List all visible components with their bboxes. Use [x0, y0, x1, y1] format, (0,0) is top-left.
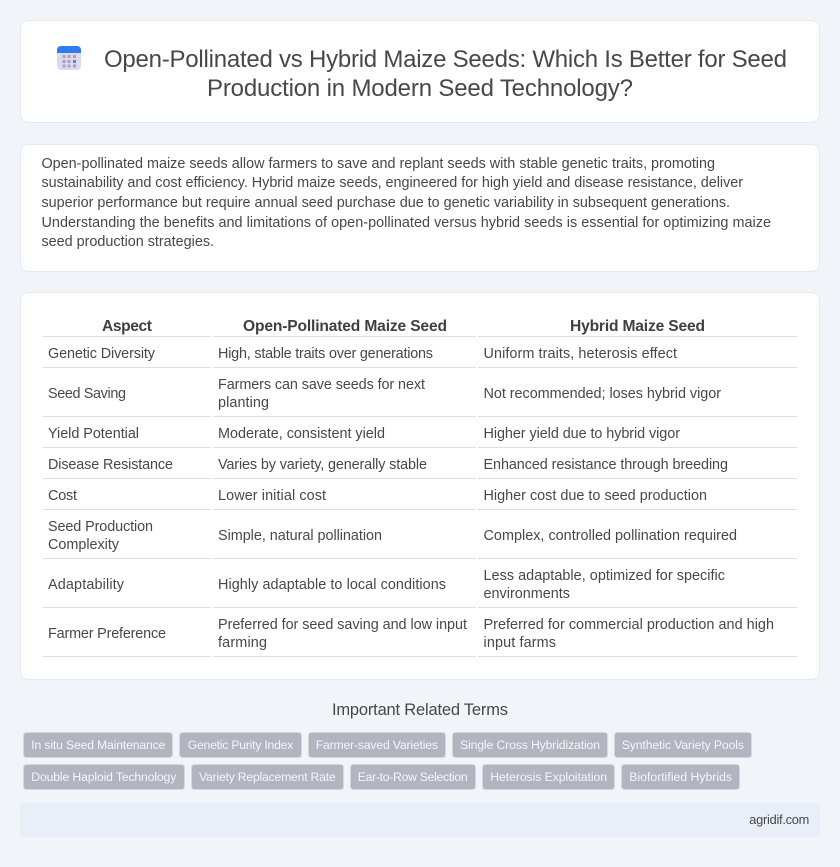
panel: title: [20, 20, 820, 122]
tag: ear-to-row selection: [350, 764, 476, 790]
tag: in situ seed maintenance: [24, 732, 172, 758]
related terms tags: [24, 732, 752, 790]
row: yield potential: Higher yield due to hybrid vigor: [484, 426, 680, 442]
tag: synthetic variety pools: Synthetic Variety Pools: [622, 738, 744, 752]
table header: Aspect: [102, 318, 152, 335]
row: adaptability: [43, 568, 797, 608]
row: genetic diversity: High, stable traits over generations: [218, 346, 433, 362]
row: cost: Cost: [48, 488, 77, 504]
tag: ear-to-row selection: Ear-to-Row Selection: [358, 770, 468, 784]
intro paragraph: superior performance but require annual seed purchase due to genetic variability in subsequent generations.: [42, 195, 730, 211]
icon: calendar: [57, 46, 81, 70]
row: yield potential: Moderate, consistent yield: [218, 426, 385, 442]
row: farmer preference: input farms: [484, 635, 556, 651]
row: farmer preference: farming: [218, 635, 267, 651]
row: seed production complexity: [43, 519, 797, 559]
row: genetic diversity: [43, 346, 797, 368]
row: seed saving: planting: [218, 395, 269, 411]
table header: Hybrid Maize Seed: [570, 318, 705, 335]
tag: variety replacement rate: Variety Replacement Rate: [199, 770, 336, 784]
row: seed saving: Farmers can save seeds for next: [218, 377, 425, 393]
row: genetic diversity: Uniform traits, heterosis effect: [484, 346, 677, 362]
row: adaptability: Less adaptable, optimized for specific: [484, 568, 725, 584]
row: disease resistance: [43, 457, 797, 479]
tag: double haploid technology: [24, 764, 184, 790]
row: genetic diversity: Genetic Diversity: [48, 346, 156, 362]
intro paragraph: Understanding the benefits and limitations of open-pollinated versus hybrid seeds is essential for optimizing maize: [42, 215, 771, 231]
row: seed saving: Seed Saving: [48, 386, 126, 402]
row: adaptability: environments: [484, 586, 570, 602]
tag: variety replacement rate: [192, 764, 344, 790]
tag: biofortified hybrids: Biofortified Hybrids: [629, 770, 732, 784]
intro paragraph: Open-pollinated maize seeds allow farmers to save and replant seeds with stable genetic traits, promoting: [42, 156, 715, 172]
table header: Open-Pollinated Maize Seed: [243, 318, 447, 335]
row: farmer preference: [43, 617, 797, 657]
tag: biofortified hybrids: [622, 764, 740, 790]
tag: in situ seed maintenance: In situ Seed Maintenance: [31, 738, 166, 752]
tag: heterosis exploitation: [482, 764, 614, 790]
tag: genetic purity index: [180, 732, 302, 758]
row: seed saving: [43, 377, 797, 417]
tag: double haploid technology: Double Haploid Technology: [31, 770, 177, 784]
row: cost: Lower initial cost: [218, 488, 326, 504]
intro paragraph: [42, 156, 771, 250]
tag: heterosis exploitation: Heterosis Exploitation: [490, 770, 607, 784]
title text: [104, 46, 787, 102]
row: cost: Higher cost due to seed production: [484, 488, 707, 504]
table header: [43, 318, 797, 337]
row: adaptability: Adaptability: [48, 577, 125, 593]
row: seed production complexity: Seed Production: [48, 519, 153, 535]
row: seed saving: Not recommended; loses hybrid vigor: [484, 386, 721, 402]
row: disease resistance: Disease Resistance: [48, 457, 173, 473]
tag: farmer-saved varieties: Farmer-saved Varieties: [316, 738, 438, 752]
intro paragraph: seed production strategies.: [42, 234, 214, 250]
row: seed production complexity: Complex, controlled pollination required: [484, 528, 737, 544]
row: disease resistance: Enhanced resistance through breeding: [484, 457, 728, 473]
panel: comparison table: [20, 292, 820, 680]
panel: introduction: [20, 144, 820, 272]
row: cost: [43, 488, 797, 510]
tag: synthetic variety pools: [614, 732, 752, 758]
row: seed production complexity: Simple, natural pollination: [218, 528, 382, 544]
row: adaptability: Highly adaptable to local conditions: [218, 577, 446, 593]
tag: single cross hybridization: Single Cross Hybridization: [460, 738, 600, 752]
row: farmer preference: Preferred for commercial production and high: [484, 617, 774, 633]
row: seed production complexity: Complexity: [48, 537, 120, 553]
tag: farmer-saved varieties: [308, 732, 446, 758]
tag: genetic purity index: Genetic Purity Index: [188, 738, 293, 752]
footer: [20, 803, 820, 837]
row: farmer preference: Preferred for seed saving and low input: [218, 617, 467, 633]
row: disease resistance: Varies by variety, generally stable: [218, 457, 427, 473]
heading: important related terms: Important Related Terms: [332, 701, 508, 719]
tag: single cross hybridization: [452, 732, 608, 758]
title text: Open-Pollinated vs Hybrid Maize Seeds: Which Is Better for Seed: [104, 46, 787, 73]
row: farmer preference: Farmer Preference: [48, 626, 166, 642]
row: yield potential: [43, 426, 797, 448]
row: yield potential: Yield Potential: [48, 426, 139, 442]
intro paragraph: sustainability and cost efficiency. Hybrid maize seeds, engineered for high yield and disease resistance, deliver: [42, 175, 743, 191]
footer: agridif.com: [749, 812, 809, 827]
title text: Production in Modern Seed Technology?: [207, 75, 633, 102]
